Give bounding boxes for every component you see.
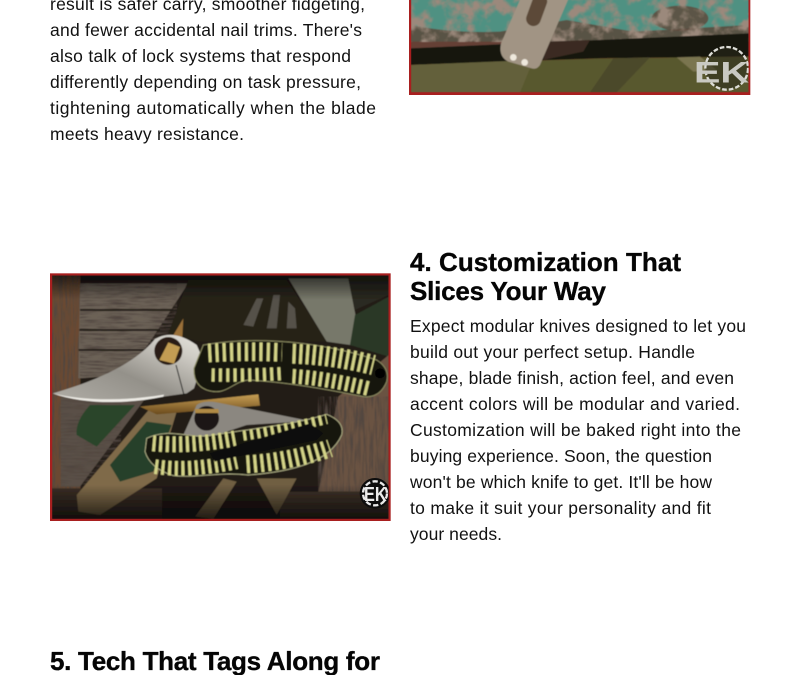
image: knife clip on patina metal bbox=[409, 0, 750, 95]
paragraph: modular customization: accent colors will be modular and varied. bbox=[410, 394, 740, 414]
paragraph: modular customization: Expect modular knives designed to let you bbox=[410, 316, 746, 336]
brass bullets bbox=[140, 394, 260, 414]
logo: EK gear bbox=[694, 47, 749, 90]
paragraph: modular customization: Customization will be baked right into the bbox=[410, 420, 741, 440]
heading: section 4: Slices Your Way bbox=[410, 276, 607, 306]
dark bag bbox=[168, 280, 298, 340]
intro paragraph: lock systems bbox=[50, 0, 376, 144]
paragraph: modular customization: to make it suit your personality and fit bbox=[410, 498, 711, 518]
small knife handle bbox=[145, 414, 342, 476]
heading: section 4: 4. Customization That bbox=[410, 247, 681, 277]
intro paragraph: lock systems: differently depending on task pressure, bbox=[50, 72, 361, 92]
paragraph: modular customization bbox=[409, 316, 746, 544]
paragraph: modular customization: won't be which knife to get. It'll be how bbox=[409, 472, 712, 492]
wood planks bbox=[52, 275, 80, 489]
paragraph: modular customization: build out your perfect setup. Handle bbox=[410, 342, 695, 362]
knife pocket clip bbox=[500, 0, 569, 69]
heading: section 4 bbox=[410, 247, 681, 306]
logo: EK gear: EK bbox=[694, 57, 749, 90]
paragraph: modular customization: shape, blade finish, action feel, and even bbox=[410, 368, 734, 388]
paragraph: modular customization: buying experience. Soon, the question bbox=[410, 446, 712, 466]
logo: EK round badge: EK bbox=[364, 483, 387, 506]
small knife blade bbox=[183, 402, 310, 438]
pocket clip bbox=[210, 423, 323, 462]
intro paragraph: lock systems: tightening automatically when the blade bbox=[50, 98, 376, 118]
intro paragraph: lock systems: meets heavy resistance. bbox=[50, 124, 244, 144]
straps and green patches bbox=[76, 405, 135, 447]
large knife handle bbox=[194, 341, 387, 397]
logo: EK round badge bbox=[360, 478, 390, 509]
paragraph: modular customization: your needs. bbox=[410, 524, 502, 544]
large knife blade bbox=[53, 335, 203, 402]
intro paragraph: lock systems: also talk of lock systems that respond bbox=[50, 46, 351, 66]
intro paragraph: lock systems: and fewer accidental nail trims. There's bbox=[50, 20, 362, 40]
image: two Spyderco folding knives with yellow ribbed handles bbox=[50, 273, 391, 521]
